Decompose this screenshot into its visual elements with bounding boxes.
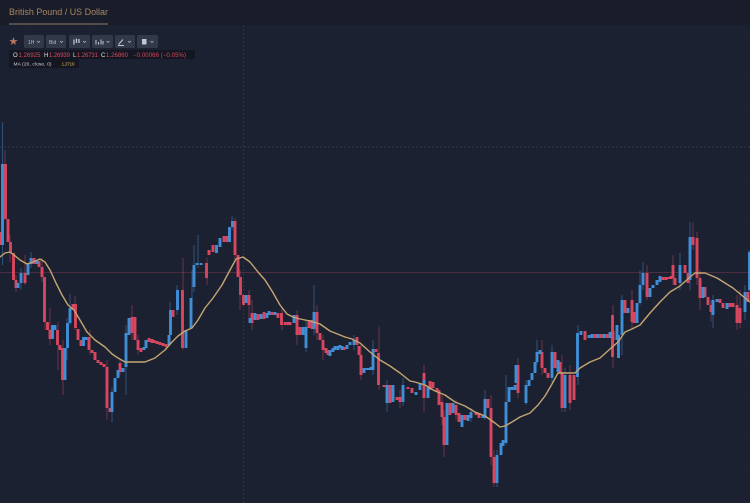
icon: favourite star: ★ <box>8 35 18 48</box>
OHLC legend: 1.26860 <box>106 53 129 59</box>
OHLC legend: C <box>101 53 106 59</box>
button: delete <box>137 35 158 48</box>
button: interval <box>24 35 44 48</box>
wicks: bullish <box>2 122 749 487</box>
title: British Pound / US Dollar <box>9 7 108 17</box>
wicks: bearish <box>5 150 740 487</box>
OHLC legend: O <box>13 53 18 59</box>
OHLC legend <box>9 50 195 59</box>
OHLC legend: −0.00066 (−0.05%) <box>133 53 186 59</box>
bullish bodies <box>2 164 750 483</box>
button: interval: 1H <box>28 40 35 46</box>
OHLC legend: 1.26939 <box>49 53 71 59</box>
active tab underline <box>9 24 108 25</box>
OHLC legend: 1.26925 <box>18 53 41 59</box>
button: chart type <box>69 35 90 48</box>
moving average legend: 1.2719 <box>62 62 75 68</box>
candlestick chart <box>0 122 750 487</box>
header bar <box>0 0 750 25</box>
OHLC legend: H <box>44 53 48 59</box>
button: price type <box>46 35 66 48</box>
toolbar <box>8 35 158 48</box>
moving average legend <box>9 59 79 68</box>
OHLC legend: 1.26731 <box>77 53 99 59</box>
bearish bodies <box>0 164 748 483</box>
price level line <box>0 272 750 274</box>
button: draw <box>115 35 135 48</box>
button: indicators <box>92 35 113 48</box>
button: price type: Bid <box>49 40 56 46</box>
moving average legend: MA (20, close, 0) <box>14 62 52 68</box>
OHLC legend: L <box>73 53 77 59</box>
moving average line <box>0 252 750 427</box>
